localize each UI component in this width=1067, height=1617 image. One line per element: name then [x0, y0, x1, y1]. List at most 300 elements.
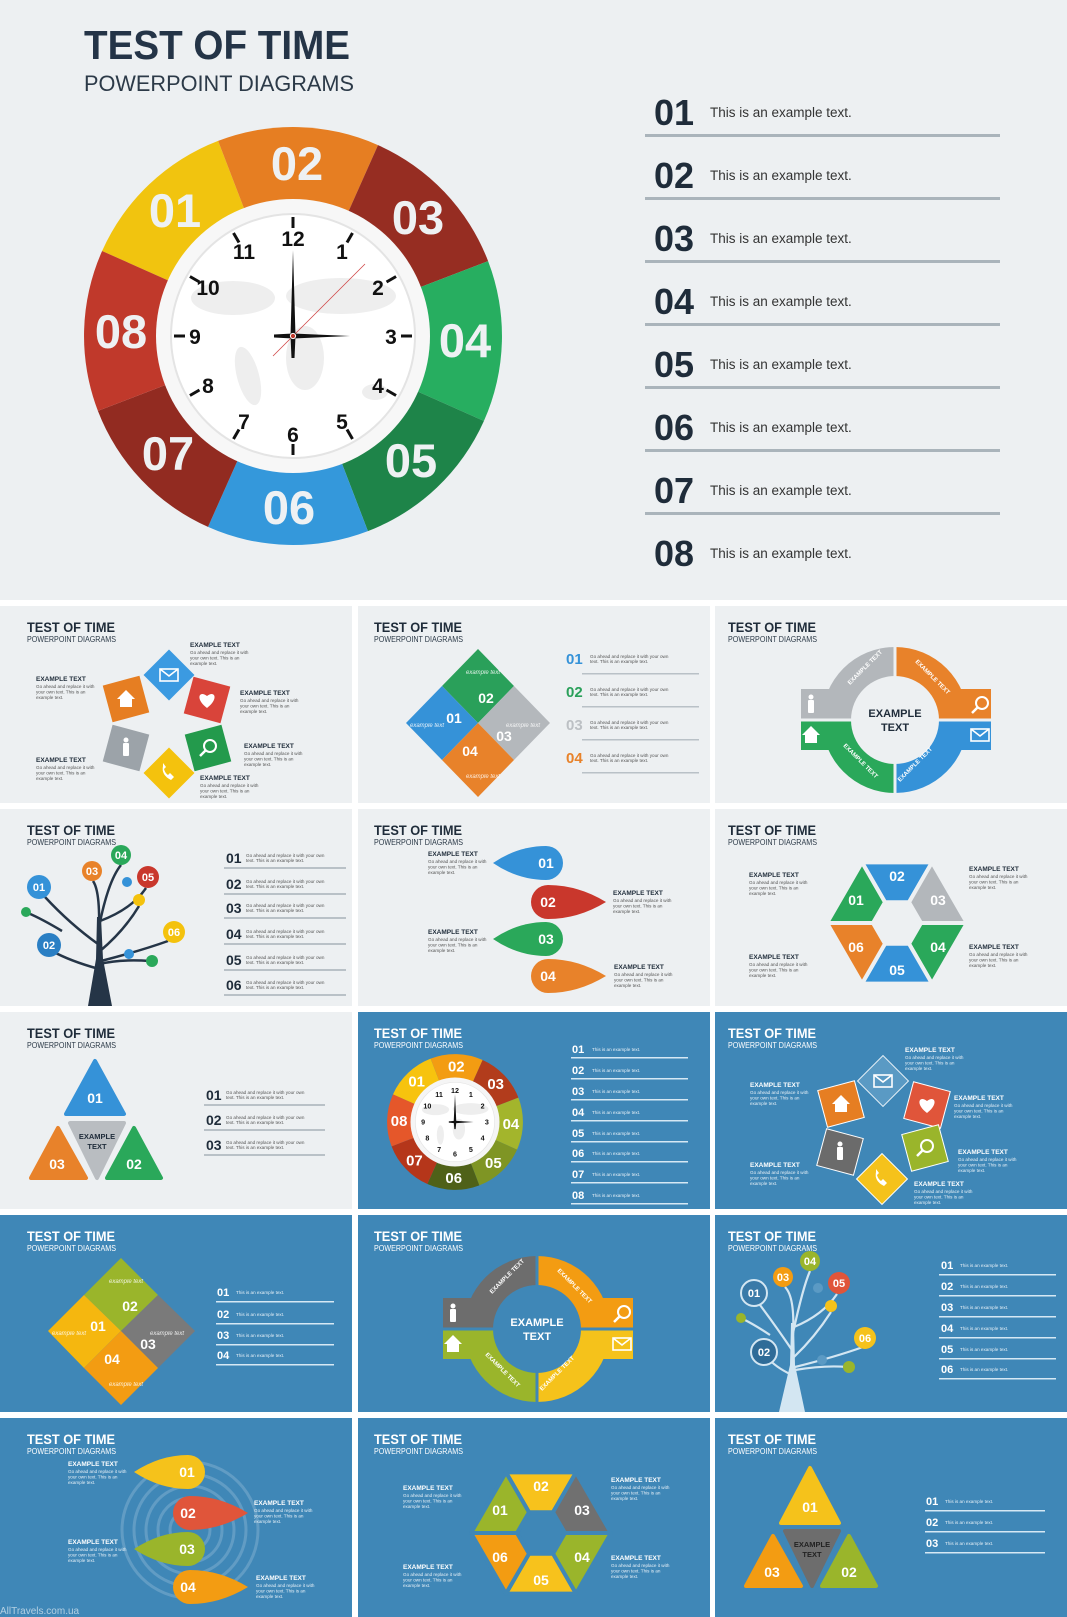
panel: hexagon (light): your own text. This is an: [749, 886, 799, 890]
panel: hexagon (light): Go ahead and replace it with: [969, 952, 1028, 957]
panel: icon tiles (blue): your own text. This is an: [750, 1096, 800, 1100]
main clock diagram: [84, 127, 502, 545]
panel: petals (blue): Go ahead and replace it with: [68, 1469, 127, 1474]
panel: tree (blue): 01: [941, 1260, 953, 1272]
panel: triangles (blue): 03: [764, 1564, 780, 1580]
panel: diamond (light): text. This is an example text.: [590, 659, 648, 664]
panel: icon tiles (blue): example text.: [914, 1200, 941, 1205]
panel: hexagon (blue): 01: [492, 1502, 508, 1518]
clock face: 6: [287, 424, 299, 447]
panel: tree (light): Go ahead and replace it with your own: [246, 853, 325, 858]
panel: triangles (light): text. This is an example text.: [226, 1145, 284, 1150]
segment labels: 05: [385, 434, 437, 487]
panel: clock (blue): This is an example text.: [592, 1151, 640, 1156]
panel: diamond (light): TEST OF TIME: [374, 619, 462, 635]
panel: petals (blue): example text.: [256, 1594, 283, 1599]
panel: diamond (blue): 03: [140, 1336, 156, 1352]
panel: icon tiles (light): example text.: [200, 794, 227, 799]
panel: clock (blue): This is an example text.: [592, 1089, 640, 1094]
panel: tree (light): Go ahead and replace it with your own: [246, 955, 325, 960]
panel: icon tiles (light): Go ahead and replace it with: [190, 650, 249, 655]
panel: petals (blue): 04: [180, 1579, 196, 1595]
panel: petals (blue): example text.: [254, 1519, 281, 1524]
clock face: 11: [233, 241, 255, 264]
panel: ring (blue): EXAMPLE TEXT: [484, 1352, 521, 1389]
panel: clock (blue): 06: [445, 1170, 462, 1187]
panel: clock (blue): 07: [572, 1169, 584, 1181]
panel: tree (blue): This is an example text.: [960, 1263, 1008, 1268]
panel: hexagon (light): your own text. This is an: [749, 968, 799, 972]
panel: diamond (blue): 01: [90, 1318, 106, 1334]
panel: clock (blue): TEST OF TIME: [374, 1025, 462, 1041]
clock face: 7: [238, 411, 250, 434]
panel: hexagon (blue): 06: [492, 1549, 508, 1565]
panel: clock (blue): This is an example text.: [592, 1131, 640, 1136]
panel: petals (light): 03: [538, 931, 554, 947]
panel: hexagon (blue): your own text. This is an: [403, 1578, 453, 1582]
panel: hexagon (blue): Go ahead and replace it with: [403, 1572, 462, 1577]
panel: icon tiles (blue): example text.: [954, 1114, 981, 1119]
panel: icon tiles (light): your own text. This is an: [240, 704, 290, 708]
segment labels: 04: [439, 314, 491, 367]
panel: triangles (blue): 03: [926, 1538, 938, 1550]
panel: clock (blue): 02: [448, 1058, 465, 1075]
panel: icon tiles (blue): TEST OF TIME: [728, 1025, 816, 1041]
panel: hexagon (light): your own text. This is an: [969, 958, 1019, 962]
panel: clock (blue): 1: [469, 1091, 473, 1099]
panel: triangles (blue): 02: [926, 1517, 938, 1529]
panel: tree (blue): 03: [941, 1302, 953, 1314]
panel: hexagon (light): [715, 809, 1067, 1006]
numbered list: This is an example text.: [710, 420, 852, 435]
panel: hexagon (light): example text.: [749, 891, 776, 896]
panel: triangles (blue): 01: [802, 1499, 818, 1515]
panel: diamond (blue): example text: [52, 1331, 86, 1337]
panel: hexagon (light): POWERPOINT DIAGRAMS: [728, 837, 817, 847]
panel: hexagon (light): EXAMPLE TEXT: [749, 954, 799, 961]
panel: clock (blue): This is an example text.: [592, 1110, 640, 1115]
panel: clock (blue): 07: [406, 1153, 423, 1170]
panel: tree (light): text. This is an example text.: [246, 908, 304, 913]
panel: diamond (light): example text: [466, 670, 500, 676]
panel: hexagon (blue): EXAMPLE TEXT: [611, 1477, 661, 1484]
panel: icon tiles (blue): EXAMPLE TEXT: [958, 1149, 1008, 1156]
panel: hexagon (blue): your own text. This is an: [611, 1568, 661, 1574]
panel: icon tiles (light): your own text. This is an: [190, 656, 240, 660]
panel: icon tiles (blue): Go ahead and replace it with: [750, 1090, 809, 1095]
panel: triangles (light): 01: [206, 1087, 222, 1103]
panel: petals (light): your own text. This is an: [614, 978, 664, 982]
panel: tree (light): text. This is an example text.: [246, 934, 304, 939]
panel: diamond (light): Go ahead and replace it with your own: [590, 654, 669, 659]
panel: ring (blue): TEXT: [523, 1331, 551, 1343]
panel: icon tiles (light): example text.: [36, 776, 63, 781]
clock face: 8: [202, 375, 214, 398]
panel: icon tiles (blue): EXAMPLE TEXT: [954, 1095, 1004, 1102]
panel: petals (light): [358, 809, 710, 1006]
panel: petals (light): Go ahead and replace it with: [613, 898, 672, 903]
panel: tree (light): 04: [115, 850, 128, 862]
panel: clock (blue): 10: [423, 1103, 431, 1111]
panel: hexagon (light): EXAMPLE TEXT: [969, 944, 1019, 951]
panel: tree (blue): TEST OF TIME: [728, 1228, 816, 1244]
panel: diamond (light): 03: [566, 717, 583, 734]
panel: hexagon (blue): TEST OF TIME: [374, 1431, 462, 1447]
panel: petals (light): EXAMPLE TEXT: [614, 964, 664, 971]
panel: hexagon (blue): 04: [574, 1549, 590, 1565]
panel: hexagon (blue): 03: [574, 1502, 590, 1518]
panel: petals (blue): your own text. This is an: [254, 1514, 304, 1518]
panel: clock (blue): 3: [485, 1119, 489, 1127]
panel: tree (blue): 02: [758, 1347, 770, 1359]
numbered list: 06: [654, 407, 694, 448]
panel: tree (blue): 02: [941, 1281, 953, 1293]
panel: icon tiles (light): [0, 606, 352, 803]
panel: diamond (blue): 04: [217, 1350, 230, 1362]
panel: ring (light): TEST OF TIME: [728, 619, 816, 635]
panel: petals (blue): your own text. This is an: [68, 1474, 118, 1480]
panel: hexagon (light): 03: [930, 892, 946, 908]
panel: icon tiles (light): your own text. This is an: [244, 756, 294, 762]
panel: tree (light): 01: [33, 882, 45, 894]
panel: icon tiles (light): your own text. This is an: [200, 788, 250, 794]
panel: petals (light): 01: [538, 855, 554, 871]
panel: tree (light): 01: [226, 850, 242, 866]
panel: clock (blue): 03: [487, 1076, 504, 1093]
panel: diamond (blue): This is an example text.: [236, 1333, 284, 1338]
panel: tree (blue): 05: [941, 1344, 953, 1356]
panel: diamond (blue): 02: [122, 1298, 138, 1314]
panel: diamond (light): text. This is an example text.: [590, 692, 648, 697]
panel: diamond (light): Go ahead and replace it with your own: [590, 753, 669, 758]
panel: petals (light): your own text. This is an: [428, 864, 478, 870]
panel: hexagon (blue): example text.: [611, 1574, 638, 1579]
panel: tree (blue): This is an example text.: [960, 1284, 1008, 1289]
panel: clock (blue): POWERPOINT DIAGRAMS: [374, 1040, 463, 1050]
panel: tree (light): POWERPOINT DIAGRAMS: [27, 837, 116, 847]
panel: hexagon (blue): EXAMPLE TEXT: [611, 1555, 661, 1562]
panel: triangles (blue): [715, 1418, 1067, 1617]
panel: tree (light): Go ahead and replace it with your own: [246, 980, 325, 985]
panel: triangles (blue): EXAMPLE: [794, 1540, 830, 1549]
numbered list: This is an example text.: [710, 231, 852, 246]
panel: tree (blue): POWERPOINT DIAGRAMS: [728, 1243, 817, 1253]
panel: diamond (light): 04: [566, 750, 583, 767]
panel: hexagon (blue): example text.: [403, 1504, 430, 1509]
panel: clock (blue): This is an example text.: [592, 1047, 640, 1052]
panel: petals (light): your own text. This is an: [428, 942, 478, 948]
panel: clock (blue): 4: [481, 1135, 485, 1143]
panel: tree (light): text. This is an example text.: [246, 985, 304, 990]
panel: ring (blue): EXAMPLE TEXT: [489, 1258, 526, 1295]
panel: clock (blue): 05: [572, 1128, 584, 1140]
panel: petals (blue): EXAMPLE TEXT: [68, 1539, 118, 1546]
panel: petals (blue): your own text. This is an: [68, 1552, 118, 1558]
panel: icon tiles (light): example text.: [190, 661, 217, 666]
panel: hexagon (light): example text.: [749, 973, 776, 978]
panel: ring (blue): EXAMPLE TEXT: [539, 1355, 576, 1392]
panel: icon tiles (light): Go ahead and replace it with: [244, 751, 303, 756]
panel: hexagon (light): Go ahead and replace it with: [969, 874, 1028, 879]
panel: icon tiles (light): your own text. This is an: [36, 690, 86, 694]
panel: diamond (blue): 03: [217, 1330, 229, 1342]
clock ring segments: [84, 127, 502, 545]
panel: clock (blue): 6: [453, 1150, 457, 1158]
panel: triangles (light): [0, 1012, 352, 1209]
numbered list: 01: [654, 92, 694, 133]
panel: ring (blue): EXAMPLE TEXT: [556, 1268, 593, 1305]
panel: hexagon (light): Go ahead and replace it with: [749, 962, 808, 967]
panel: icon tiles (light): example text.: [240, 709, 267, 714]
numbered list: 03: [654, 218, 694, 259]
panel: clock (blue): 08: [572, 1190, 584, 1202]
numbered list: This is an example text.: [710, 105, 852, 120]
panel: diamond (light): 01: [446, 710, 462, 726]
panel: hexagon (blue): EXAMPLE TEXT: [403, 1485, 453, 1492]
panel: triangles (light): TEST OF TIME: [27, 1025, 115, 1041]
panel: diamond (blue): example text: [150, 1331, 184, 1337]
panel: tree (light): text. This is an example text.: [246, 884, 304, 889]
panel: diamond (blue): TEST OF TIME: [27, 1228, 115, 1244]
panel: hexagon (light): 02: [889, 868, 905, 884]
panel: icon tiles (blue): EXAMPLE TEXT: [905, 1047, 955, 1054]
panel: diamond (blue): 04: [104, 1351, 120, 1367]
panel: hexagon (blue): [358, 1418, 710, 1617]
panel: tree (light): Go ahead and replace it with your own: [246, 879, 325, 884]
panel: tree (light): 05: [226, 952, 242, 968]
panel: triangles (light): EXAMPLE: [79, 1132, 115, 1141]
panel: diamond (light): 01: [566, 651, 583, 668]
panel: ring (blue): [358, 1215, 710, 1412]
panel: tree (light): 03: [226, 900, 242, 916]
panel: triangles (light): Go ahead and replace it with your own: [226, 1140, 305, 1145]
panel: petals (blue): EXAMPLE TEXT: [68, 1461, 118, 1468]
panel: icon tiles (light): example text.: [36, 695, 63, 700]
panel: triangles (light): 03: [206, 1137, 222, 1153]
numbered list: 04: [654, 281, 694, 322]
panel: icon tiles (blue): example text.: [750, 1101, 777, 1106]
panel: hexagon (blue): POWERPOINT DIAGRAMS: [374, 1446, 463, 1456]
panel: petals (light): your own text. This is an: [613, 904, 663, 908]
panel: petals (blue): Go ahead and replace it with: [68, 1547, 127, 1552]
panel: tree (light): 06: [168, 927, 180, 939]
panel: diamond (blue): example text: [109, 1279, 143, 1285]
panel: triangles (light): Go ahead and replace it with your own: [226, 1090, 305, 1095]
panel: ring (light): EXAMPLE TEXT: [847, 649, 884, 686]
panel: petals (blue): example text.: [68, 1480, 95, 1485]
panel: petals (blue): example text.: [68, 1558, 95, 1563]
panel: ring (light): [715, 606, 1067, 803]
panel: hexagon (blue): Go ahead and replace it with: [611, 1485, 670, 1490]
panel: hexagon (blue): 02: [533, 1478, 549, 1494]
panel: tree (light): 05: [142, 872, 154, 884]
panel: petals (light): 04: [540, 968, 556, 984]
panel: hexagon (light): 05: [889, 962, 905, 978]
panel: diamond (blue): 02: [217, 1309, 229, 1321]
numbered list: 07: [654, 470, 694, 511]
title: TEST OF TIME: [84, 22, 350, 68]
panel: hexagon (light): 04: [930, 939, 946, 955]
numbered list: This is an example text.: [710, 546, 852, 561]
panel: tree (blue): 04: [804, 1256, 817, 1268]
panel: icon tiles (light): EXAMPLE TEXT: [200, 775, 250, 782]
panel: triangles (blue): TEXT: [802, 1550, 822, 1559]
panel: icon tiles (light): EXAMPLE TEXT: [240, 690, 290, 697]
panel: diamond (light): [358, 606, 710, 803]
panel: tree (blue): 05: [833, 1278, 845, 1290]
clock hands: [273, 250, 365, 358]
panel: hexagon (light): example text.: [969, 885, 996, 890]
panel: triangles (light): 03: [49, 1156, 65, 1172]
panel: tree (blue): 04: [941, 1323, 954, 1335]
panel: ring (blue): EXAMPLE: [510, 1317, 564, 1329]
panel: triangles (blue): POWERPOINT DIAGRAMS: [728, 1446, 817, 1456]
panel: hexagon (blue): Go ahead and replace it with: [611, 1563, 670, 1568]
panel: petals (blue): 02: [180, 1505, 196, 1521]
panel: clock (blue): 01: [408, 1074, 425, 1091]
panel: tree (blue): This is an example text.: [960, 1347, 1008, 1352]
panel: icon tiles (blue): example text.: [905, 1066, 932, 1071]
panel: icon tiles (light): example text.: [244, 762, 271, 767]
segment labels: 06: [263, 481, 315, 534]
panel: tree (light): 03: [86, 866, 98, 878]
panel: icon tiles (light): EXAMPLE TEXT: [244, 743, 294, 750]
panel: icon tiles (light): Go ahead and replace it with: [240, 698, 299, 703]
panel: clock (blue): 06: [572, 1148, 584, 1160]
panel: triangles (light): 01: [87, 1090, 103, 1106]
panel: clock (blue): 02: [572, 1065, 584, 1077]
clock face: [156, 199, 430, 473]
panel: diamond (light): Go ahead and replace it with your own: [590, 720, 669, 725]
segment labels: [95, 137, 491, 534]
panel: icon tiles (blue): Go ahead and replace it with: [905, 1055, 964, 1060]
panel: ring (light): EXAMPLE TEXT: [914, 659, 951, 696]
panel: clock (blue): 9: [421, 1119, 425, 1127]
title: POWERPOINT DIAGRAMS: [84, 71, 354, 96]
panel: tree (blue): This is an example text.: [960, 1305, 1008, 1310]
panel: petals (blue): EXAMPLE TEXT: [256, 1575, 306, 1582]
clock face: 10: [196, 277, 220, 300]
panel: hexagon (blue): example text.: [611, 1496, 638, 1501]
panel: clock (blue): 01: [572, 1044, 584, 1056]
panel: icon tiles (light): your own text. This is an: [36, 770, 86, 776]
panel: clock (blue): 03: [572, 1086, 584, 1098]
panel: clock (blue): 04: [503, 1116, 520, 1133]
panel: icon tiles (light): TEST OF TIME: [27, 619, 115, 635]
panel: ring (light): EXAMPLE TEXT: [897, 746, 934, 783]
panel: icon tiles (blue): Go ahead and replace it with: [750, 1170, 809, 1175]
panel: tree (light): text. This is an example text.: [246, 960, 304, 965]
segment labels: 08: [95, 305, 147, 358]
panel: icon tiles (blue): example text.: [958, 1168, 985, 1173]
panel: clock (blue): 11: [435, 1091, 443, 1099]
panel: petals (light): EXAMPLE TEXT: [428, 851, 478, 858]
panel: hexagon (light): 01: [848, 892, 864, 908]
clock face: 5: [336, 411, 348, 434]
panel: triangles (light): TEXT: [87, 1142, 107, 1151]
panel: icon tiles (light): Go ahead and replace it with: [36, 684, 95, 689]
panel: icon tiles (light): POWERPOINT DIAGRAMS: [27, 634, 116, 644]
panel: triangles (blue): This is an example text.: [945, 1541, 993, 1546]
panel: hexagon (light): EXAMPLE TEXT: [969, 866, 1019, 873]
segment labels: 01: [149, 184, 201, 237]
panel: clock (blue): 12: [451, 1087, 459, 1095]
panel: diamond (light): example text: [410, 723, 444, 729]
panel: clock (blue): [358, 1012, 710, 1209]
panel: triangles (light): 02: [206, 1112, 222, 1128]
panel: petals (light): Go ahead and replace it with: [428, 937, 487, 942]
panel: petals (blue): Go ahead and replace it with: [256, 1583, 315, 1588]
panel: petals (blue): TEST OF TIME: [27, 1431, 115, 1447]
segment labels: 03: [392, 191, 444, 244]
panel: hexagon (light): TEST OF TIME: [728, 822, 816, 838]
clock face: 4: [372, 375, 384, 398]
panel: triangles (light): 02: [126, 1156, 142, 1172]
segment labels: 02: [271, 137, 323, 190]
panel: icon tiles (blue): EXAMPLE TEXT: [914, 1181, 964, 1188]
panel: diamond (light): 02: [566, 684, 583, 701]
panel: tree (light): Go ahead and replace it with your own: [246, 903, 325, 908]
numbered list: This is an example text.: [710, 168, 852, 183]
clock face: 12: [281, 228, 305, 251]
panel: icon tiles (blue): EXAMPLE TEXT: [750, 1162, 800, 1169]
panel: diamond (blue): POWERPOINT DIAGRAMS: [27, 1243, 116, 1253]
numbered list: This is an example text.: [710, 294, 852, 309]
panel: petals (light): example text.: [428, 870, 455, 875]
panel: diamond (light): POWERPOINT DIAGRAMS: [374, 634, 463, 644]
panel: petals (light): EXAMPLE TEXT: [613, 890, 663, 897]
panel: petals (blue): EXAMPLE TEXT: [254, 1500, 304, 1507]
top section background: [0, 0, 1067, 600]
panel: tree (blue): 03: [777, 1272, 789, 1284]
panel: hexagon (light): Go ahead and replace it with: [749, 880, 808, 885]
title: [84, 22, 354, 96]
segment labels: 07: [142, 427, 194, 480]
clock face: 9: [189, 326, 201, 349]
panel: ring (blue): POWERPOINT DIAGRAMS: [374, 1243, 463, 1253]
panel: diamond (light): 03: [496, 728, 512, 744]
panel: tree (light): 02: [43, 940, 55, 952]
panel: icon tiles (blue): [715, 1012, 1067, 1209]
panel: clock (blue): 04: [572, 1107, 585, 1119]
panel: tree (blue): 01: [748, 1288, 760, 1300]
panel: tree (light): text. This is an example text.: [246, 858, 304, 863]
panel: triangles (light): Go ahead and replace it with your own: [226, 1115, 305, 1120]
panel: hexagon (blue): Go ahead and replace it with: [403, 1493, 462, 1498]
clock face: 2: [372, 277, 384, 300]
panel: triangles (blue): This is an example text.: [945, 1520, 993, 1525]
panel: hexagon (light): 06: [848, 939, 864, 955]
panel: clock (blue): This is an example text.: [592, 1068, 640, 1073]
panel: diamond (light): 04: [462, 743, 478, 759]
panel: tree (light): [0, 809, 352, 1006]
panel: diamond (light): text. This is an example text.: [590, 758, 648, 763]
panel: diamond (blue): This is an example text.: [236, 1353, 284, 1358]
panel: triangles (light): text. This is an example text.: [226, 1120, 284, 1125]
panel: clock (blue): This is an example text.: [592, 1172, 640, 1177]
panel: petals (light): Go ahead and replace it with: [428, 859, 487, 864]
panel: diamond (light): text. This is an example text.: [590, 725, 648, 730]
panel: tree (blue): 06: [941, 1364, 953, 1376]
panel: petals (light): Go ahead and replace it with: [614, 972, 673, 977]
panel: petals (blue): Go ahead and replace it with: [254, 1508, 313, 1513]
panel: clock (blue): 2: [481, 1103, 485, 1111]
panel: diamond (blue): This is an example text.: [236, 1312, 284, 1317]
numbered list: 02: [654, 155, 694, 196]
panel: triangles (blue): 02: [841, 1564, 857, 1580]
panel: hexagon (blue): your own text. This is an: [403, 1498, 453, 1504]
panel: ring (light): EXAMPLE: [868, 708, 922, 720]
